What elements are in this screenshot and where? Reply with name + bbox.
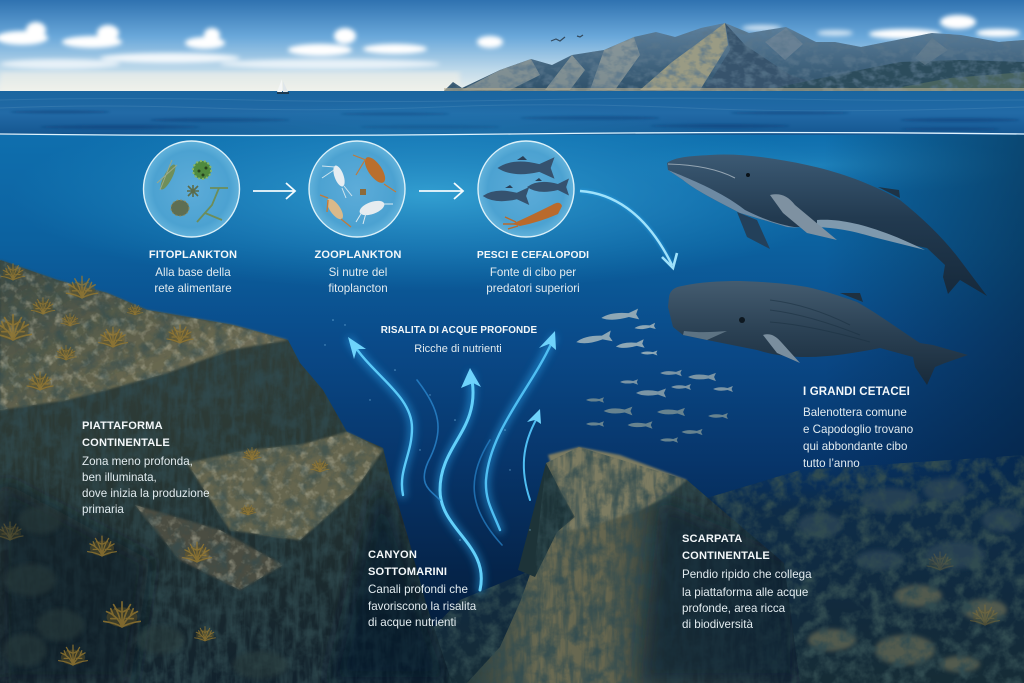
text: i grandi cetacei: qui abbondante cibo <box>803 440 907 453</box>
text: i grandi cetacei: Balenottera comune <box>803 406 907 419</box>
text: pesci e cefalopodi: PESCI E CEFALOPODI <box>477 250 589 261</box>
school of fish <box>575 309 733 443</box>
text: fitoplankton: FITOPLANKTON <box>149 249 237 261</box>
boulders <box>3 506 288 679</box>
seabed centre: continental slope <box>460 440 810 683</box>
text: scarpata continentale: profonde, area ricca <box>682 602 786 615</box>
text: scarpata continentale: di biodiversità <box>682 618 753 631</box>
text: piattaforma continentale: Zona meno profonda, <box>82 455 193 468</box>
seaweed <box>0 264 329 665</box>
sperm whale <box>668 281 968 385</box>
text: zooplankton: Si nutre del <box>329 266 387 279</box>
nutrient particles <box>324 319 531 541</box>
text: zooplankton: fitoplancton <box>328 282 388 295</box>
nutrient upwelling arrows <box>348 331 556 590</box>
text: piattaforma continentale: dove inizia la produzione <box>82 487 210 500</box>
text: pesci e cefalopodi: Fonte di cibo per <box>490 266 576 279</box>
text: canyon sottomarini: Canali profondi che <box>368 583 468 596</box>
text: canyon sottomarini: di acque nutrienti <box>368 616 456 629</box>
text: pesci e cefalopodi <box>477 250 589 295</box>
text: fitoplankton: rete alimentare <box>154 282 232 295</box>
clouds <box>0 15 1020 69</box>
text: scarpata continentale: Pendio ripido che collega <box>682 568 812 581</box>
text: canyon sottomarini: favoriscono la risalita <box>368 600 477 613</box>
text: fitoplankton <box>149 249 237 295</box>
text: piattaforma continentale: CONTINENTALE <box>82 437 170 449</box>
text: scarpata continentale: la piattaforma alle acque <box>682 586 808 599</box>
text: risalita di acque profonde <box>381 325 538 355</box>
text: scarpata continentale <box>682 533 812 631</box>
text: fitoplankton: Alla base della <box>155 266 231 279</box>
text: pesci e cefalopodi: predatori superiori <box>486 282 580 295</box>
text: scarpata continentale: CONTINENTALE <box>682 550 770 562</box>
text: zooplankton: ZOOPLANKTON <box>314 249 402 261</box>
text: piattaforma continentale: primaria <box>82 503 124 516</box>
circle: pesci e cefalopodi <box>478 141 574 237</box>
arrow: zooplankton to pesci <box>419 183 463 199</box>
text: scarpata continentale: SCARPATA <box>682 533 742 545</box>
seabed left: continental shelf <box>0 255 460 683</box>
seabed right <box>380 455 1024 683</box>
text: risalita di acque profonde: Ricche di nutrienti <box>414 343 502 355</box>
text: canyon sottomarini: CANYON <box>368 549 417 561</box>
sea surface <box>0 35 1024 136</box>
arrow: fitoplankton to zooplankton <box>253 183 295 199</box>
icon: birds <box>551 35 583 41</box>
text: i grandi cetacei: tutto l’anno <box>803 457 860 470</box>
fin whale <box>667 155 987 296</box>
text: i grandi cetacei: e Capodoglio trovano <box>803 423 913 436</box>
text: risalita di acque profonde: RISALITA DI ACQUE PROFONDE <box>381 325 538 336</box>
text: piattaforma continentale <box>82 420 210 516</box>
text: piattaforma continentale: ben illuminata, <box>82 471 157 484</box>
lit rock surfaces <box>0 260 383 590</box>
background: sky <box>0 0 1024 92</box>
mountains <box>444 20 1024 91</box>
text: canyon sottomarini <box>368 549 477 629</box>
text: i grandi cetacei: I GRANDI CETACEI <box>803 386 910 398</box>
circle: zooplankton <box>309 141 405 237</box>
text: canyon sottomarini: SOTTOMARINI <box>368 566 447 578</box>
curved arrow: to whales <box>580 191 677 268</box>
text: i grandi cetacei <box>803 386 913 470</box>
text: zooplankton <box>314 249 402 295</box>
text: piattaforma continentale: PIATTAFORMA <box>82 420 163 432</box>
icon: sailboat <box>277 79 289 94</box>
circle: fitoplankton <box>144 141 240 237</box>
